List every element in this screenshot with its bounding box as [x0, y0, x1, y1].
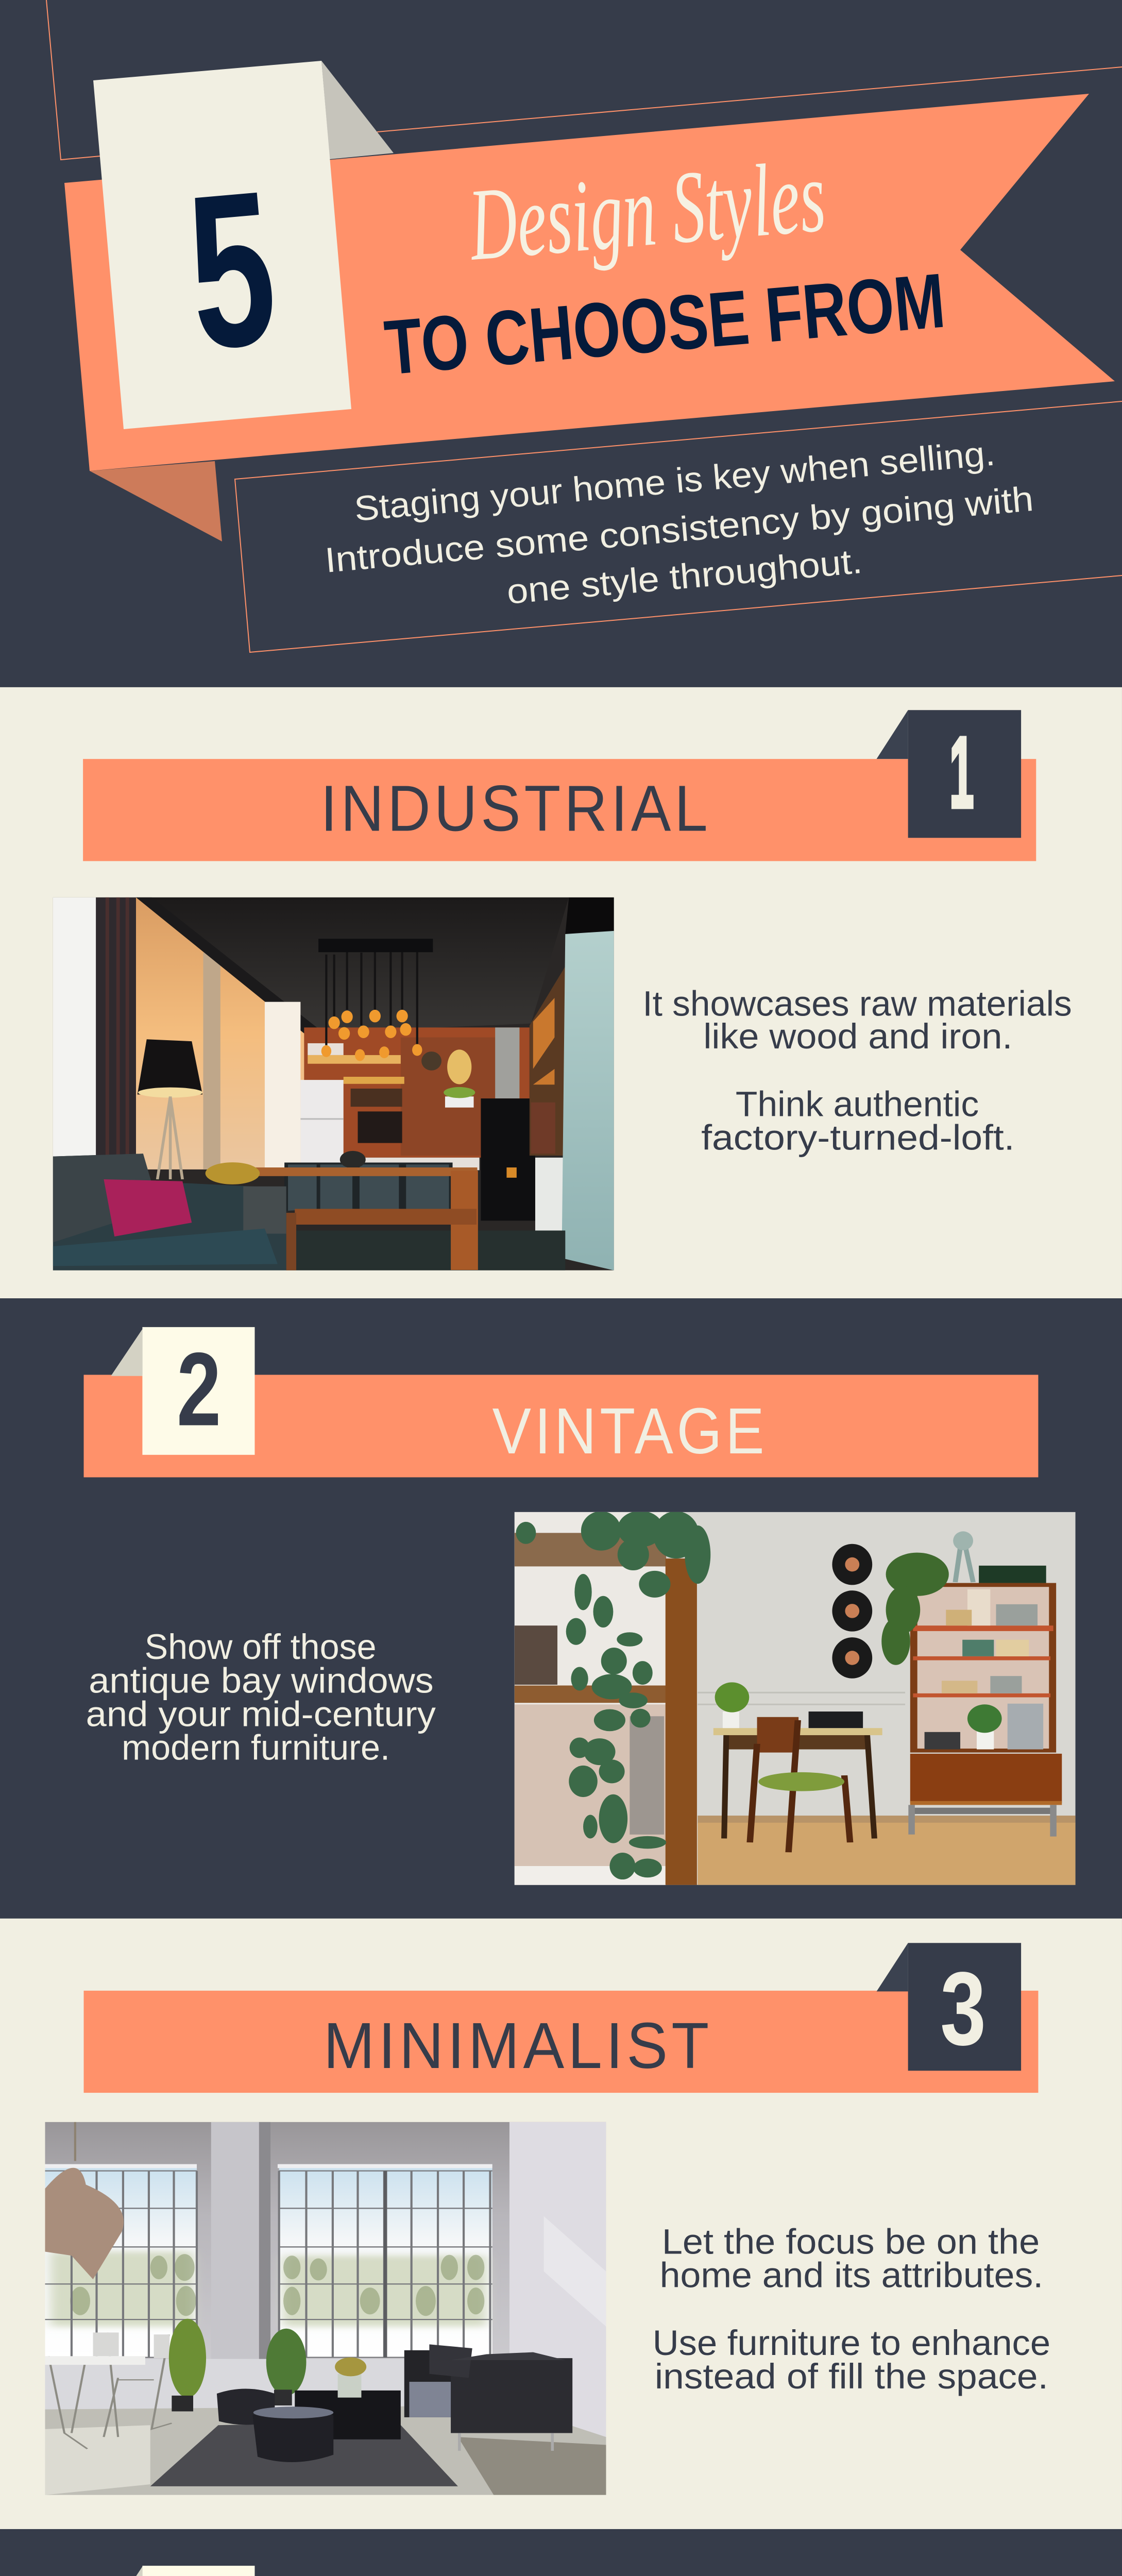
outline frame: intro box: [235, 401, 1122, 652]
ribbon fold: shadow under ribbon: [90, 461, 222, 541]
photo: vintage study: [515, 1511, 1076, 1885]
number tab: [908, 710, 1021, 838]
panel: section 2 vintage: [0, 1298, 1122, 1919]
body text: [86, 1628, 436, 1767]
body text: [642, 984, 1072, 1158]
heading: Industrial: INDUSTRIAL: [320, 772, 711, 845]
big number 5: 5: [180, 145, 284, 396]
heading banner: [84, 1375, 1038, 1477]
panel: section 1 industrial: [0, 687, 1122, 1298]
intro text: [324, 433, 1035, 612]
heading banner: [84, 1991, 1038, 2093]
intro text: one style throughout.: [505, 541, 864, 612]
photo: industrial kitchen: [53, 897, 614, 1270]
panel: section 3 minimalist: [0, 1919, 1122, 2530]
number tab: [142, 2566, 254, 2576]
body text: and your mid-century: [86, 1694, 436, 1734]
intro text: Staging your home is key when selling.: [353, 433, 997, 529]
body text: antique bay windows: [89, 1661, 434, 1700]
panel: hero header: [0, 0, 1122, 687]
number tab: [908, 1943, 1021, 2071]
outline frame: top: [46, 0, 1122, 160]
body text: Show off those: [145, 1628, 377, 1667]
body text: [653, 2222, 1050, 2396]
ribbon banner: [64, 94, 1115, 471]
panel: section 2 vintage: 2: [177, 1331, 221, 1447]
number tab fold: [111, 2567, 142, 2576]
title script: Design Styles: Design Styles: [464, 139, 829, 282]
number tab fold: [877, 1943, 908, 1991]
number card fold: [321, 61, 394, 159]
number tab fold: [877, 710, 908, 759]
panel: section 3 minimalist: 3: [940, 1950, 986, 2067]
number tab fold: [111, 1329, 142, 1376]
intro text: Introduce some consistency by going with: [324, 479, 1035, 580]
number card: [93, 61, 351, 429]
heading: Minimalist: MINIMALIST: [324, 2010, 712, 2082]
body text: modern furniture.: [122, 1728, 390, 1767]
photo: minimalist living room: [45, 2122, 606, 2495]
heading banner: [83, 759, 1036, 861]
panel: section 4 rustic: [0, 2529, 1122, 2576]
panel: section 1 industrial: 1: [949, 716, 974, 828]
title: To choose from: TO CHOOSE FROM: [381, 257, 948, 391]
number tab: [142, 1327, 254, 1455]
panel: section 2 vintage: VINTAGE: [492, 1395, 768, 1467]
